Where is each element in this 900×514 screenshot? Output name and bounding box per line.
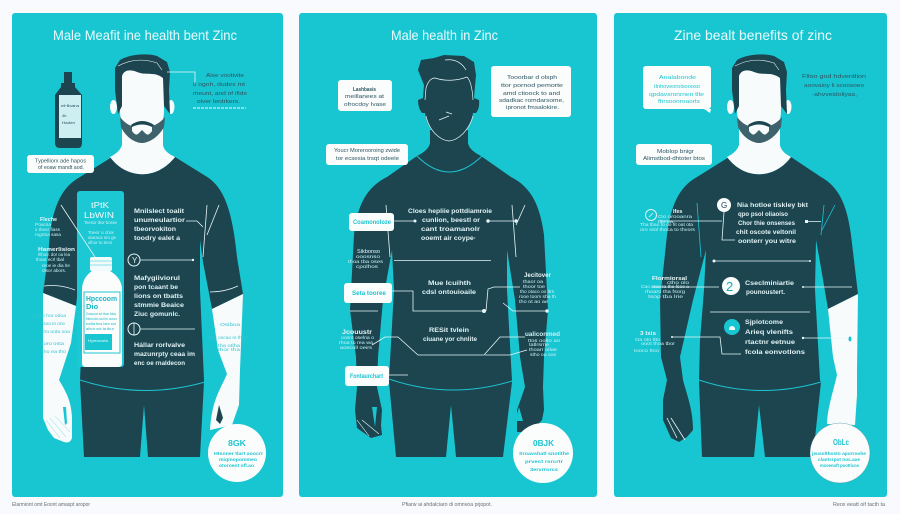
badge — [208, 424, 266, 482]
callout: top right card: sdadkac romdarsome, — [499, 98, 565, 104]
benefit three: tooco ttoo — [634, 348, 660, 353]
icon: dropper bottle: eHbara — [61, 103, 80, 108]
left side notes: tho oota ooa — [42, 329, 71, 334]
label: upper chest: cant troamanolr — [421, 226, 480, 233]
left side notes: tho ea tho — [42, 349, 67, 354]
label: lower: Fontaurchart — [350, 373, 383, 380]
left side notes — [33, 217, 248, 354]
left side notes: Fleche — [40, 217, 57, 223]
supplement card and bottle: bteocoto sa lhe ouron — [86, 317, 117, 321]
callout: speech bubble: fhrsoonroaorts — [658, 99, 700, 105]
badge: mxoenoft pootticox — [820, 463, 859, 469]
benefit list: lions on tbatts — [134, 293, 183, 300]
benefit two: ctho olo — [667, 280, 690, 285]
callout: speech bubble — [643, 66, 711, 113]
callout: speech bubble: Aoalabonde — [659, 75, 696, 81]
callout: top right note — [802, 74, 866, 98]
callout: top left card: meillanees at — [345, 94, 385, 100]
badge: Htsnner tlart aoocrr — [214, 451, 263, 457]
supplement card and bottle: Dio — [86, 302, 98, 311]
label: upper chest: Cloes hepliie pottdiamroie — [408, 208, 492, 215]
figure: bearded man with one dark arm — [660, 54, 858, 457]
label: middle — [344, 273, 557, 313]
label: middle: Jecitover — [524, 273, 552, 279]
label: upper chest: Coamonoloze — [353, 219, 392, 226]
left side notes: reoe ie dia lre — [42, 263, 71, 268]
badge — [513, 423, 573, 483]
label: lower: ciuane yor chnlite — [423, 336, 477, 343]
left side notes: tsoa to one — [42, 321, 66, 326]
callout: top right note: -ahvveidoliyas, — [812, 92, 858, 98]
title: Male Meafit ine health bent Zinc — [53, 27, 237, 43]
title: Male health in Zinc — [391, 27, 498, 43]
callout: top right card: amd ctioock to and — [503, 91, 560, 97]
badge: ObLc — [833, 437, 849, 447]
label: lower: RESit tvlein — [429, 327, 469, 334]
left side notes: Ilthoo: dor oa lea — [38, 252, 71, 257]
benefit list: pon tcaant be — [134, 284, 178, 291]
label: lower: aoscoll oeirs — [340, 345, 372, 350]
left side notes: x theor fiass — [35, 227, 60, 232]
label: middle: rooe toom sha th — [519, 294, 557, 299]
label: lower: Jcouustr — [342, 329, 373, 336]
benefit list: mazunrpty ceaa im — [134, 351, 195, 358]
label: lower: ttos oolto ao — [528, 338, 561, 343]
benefit one: oro otol thoca to thvors — [640, 227, 695, 232]
label: upper chest: cunlion, beestl or — [422, 217, 480, 224]
left side notes: otsor abors. — [42, 268, 66, 273]
icon: dropper bottle — [55, 72, 82, 148]
callout: mid left card: Alimstbod-dhtoter btos — [643, 156, 705, 162]
callout: bottle note — [27, 155, 94, 173]
benefit list: unumeulartior — [134, 217, 185, 224]
figure: bearded man in dark shirt — [43, 54, 243, 457]
benefit list — [128, 205, 219, 367]
callout: hair note — [167, 72, 247, 108]
badge: Sroavshatl snotithe — [519, 451, 569, 457]
label: upper chest: Sikbonso — [357, 249, 380, 255]
label: lower: thoarr otlae — [529, 347, 558, 352]
callout: top right card: ipronot fmsalokire. — [506, 105, 559, 111]
benefit two: pounoustert. — [746, 289, 785, 296]
left side notes: Ooce hor odoa — [33, 313, 67, 318]
left side notes: tha otlha — [218, 343, 241, 348]
callout: mid left card: tor ecsesia trsqt odeele — [336, 156, 399, 162]
benefit one: Tha tbao to oo fit oat ota — [640, 222, 694, 227]
badge: miqmopommeo — [219, 457, 257, 463]
benefit three: Sjplotcome — [745, 319, 783, 326]
callout: speech bubble: qpdavsronrnen tlte — [649, 92, 704, 98]
label: upper chest: cpolhos — [356, 264, 378, 269]
callout: top right card: Tooorbar d olsph — [507, 75, 557, 81]
benefit one: oonterr you witre — [738, 238, 796, 245]
label: upper chest: ooemt air coype· — [421, 235, 476, 242]
left side notes: Hamerlision — [38, 247, 76, 253]
benefit list: tbeorvokiton — [134, 226, 176, 233]
label: lower: oosnt oselna o — [341, 335, 375, 340]
callout: top left card: ofrocdoy Ivase — [344, 102, 386, 108]
benefit three: 3 Ixis — [640, 331, 656, 337]
badge: otoroent ofl.ao — [219, 463, 254, 469]
icon: dropper bottle: Haden — [62, 120, 75, 125]
label: lower: tatlrsrne — [529, 342, 550, 347]
label: upper chest: thoa tba oses — [348, 259, 383, 264]
label: lower — [339, 327, 561, 386]
panel: right figure — [614, 13, 887, 508]
left side notes: Poacsa — [35, 222, 52, 227]
badge — [810, 423, 870, 483]
supplement card and bottle — [61, 191, 124, 367]
benefit one: tlto oa — [658, 219, 674, 224]
label: middle: tho ot ao ae — [519, 299, 549, 304]
callout: top right card: ttor pornod pemorte — [501, 83, 563, 89]
label: lower: ualiconmed — [525, 331, 560, 338]
label: lower: stho oa oos — [530, 352, 556, 357]
badge: prvect rsrcrtr — [525, 459, 563, 465]
benefit two: 2 — [726, 279, 733, 294]
figure: silhouette — [350, 55, 548, 457]
supplement card and bottle: LbWIN — [84, 211, 114, 220]
caption: Reox eeatt oif tacth ta — [833, 502, 885, 508]
callout: top left card — [338, 80, 392, 111]
callout: top right note: Flloo god hdventlion — [802, 74, 866, 80]
benefit one: Ifes — [673, 209, 682, 215]
callout: top right card — [491, 66, 571, 117]
benefit one: chit oscote veltonil — [736, 229, 796, 236]
supplement card and bottle: Toeor o cbor — [88, 230, 115, 235]
callout: hair note: Alse vootivite — [206, 73, 244, 79]
supplement card and bottle: alhor to teos — [88, 240, 112, 245]
badge: clantsrpot noc.axe — [818, 457, 860, 463]
label: middle: tho otaco oo tlrs — [520, 289, 554, 294]
callout: mid left card: Youcr Morerooroing zwide — [334, 148, 400, 154]
label: middle: thoor toe — [523, 284, 546, 289]
supplement card and bottle: tPtK — [91, 201, 110, 210]
benefit one — [640, 198, 821, 245]
benefit list: stmmie Beaice — [134, 302, 184, 309]
badge: 3ervrrorcs — [530, 467, 558, 473]
callout: hair note: tl ogoh, dudes mt — [193, 82, 246, 88]
left side notes: Oor oocao re thea — [209, 335, 248, 340]
label: lower: rhoa to rea wa — [339, 340, 374, 345]
benefit three — [634, 319, 852, 356]
badge: jeusolthosto aporroohe — [811, 451, 866, 457]
benefit list: Hállar rorlvalve — [134, 342, 185, 349]
callout: hair note: oiver lentrkers. — [197, 99, 240, 105]
supplement card and bottle: ataraca sro ge — [88, 235, 117, 240]
left side notes: toro osta — [42, 341, 65, 346]
benefit three: Oa oto tlto — [635, 337, 661, 342]
callout: mid left card: Moblop bnigr — [657, 149, 694, 155]
label: upper chest — [348, 208, 518, 269]
callout: mid left card — [326, 144, 408, 165]
supplement card and bottle: Teesor tbor bosse — [84, 220, 118, 225]
benefit three: Arieq vlenifts — [745, 329, 793, 336]
callout: mid left card — [636, 144, 712, 165]
supplement card and bottle: Hpecoots — [88, 339, 108, 343]
benefit one: qpo psol oliaoiso — [738, 211, 788, 218]
callout: bottle note: Typelliorx ade hapos — [35, 158, 86, 164]
label: upper chest: ooosnso — [356, 254, 381, 259]
left side notes: thor tha — [218, 347, 241, 352]
callout: speech bubble: tlnhoveorolsoooso — [654, 84, 700, 90]
benefit list: Mafygiiviorul — [134, 275, 180, 282]
benefit two: Flormiorsal — [652, 276, 688, 282]
benefit list: toodry ealet a — [134, 235, 180, 242]
supplement card and bottle: eoilta ttos bea sor — [86, 322, 117, 326]
benefit list: Y — [132, 256, 138, 265]
benefit three: fcola eonvotlons — [745, 349, 805, 356]
callout: top left card: Lashbasis — [353, 87, 376, 93]
panel: center silhouette — [299, 13, 597, 508]
benefit one: Oo orooanra — [658, 214, 693, 219]
benefit three: rtactnr eetnue — [745, 339, 795, 346]
caption: Pfiarw ai ahdalciaro di omnvoa prjopot. — [402, 502, 492, 508]
callout: hair note: meunt, and of ifide — [193, 91, 247, 97]
callout: top right note: aoovaioy li scoosoeo — [804, 83, 864, 89]
left side notes: rogrtoa sasa — [35, 232, 62, 237]
benefit one: Chor thie onsenses — [738, 220, 795, 227]
icon: dropper bottle: 4b — [62, 113, 67, 118]
benefit one: G — [721, 201, 727, 210]
supplement card and bottle: alhor oct ta tbur — [86, 327, 115, 331]
label: middle: Seta tooree — [352, 290, 387, 297]
benefit two: tsop tba lrie — [648, 294, 684, 299]
panel: left figure with supplement — [12, 13, 283, 508]
supplement card and bottle: Zoacoot srt tbar bios — [86, 312, 116, 316]
badge: 8GK — [228, 438, 247, 448]
label: middle: thaor oa — [523, 279, 544, 284]
benefit list: Ziuc gomunlc. — [134, 311, 180, 318]
label: middle: cdsl ontouioaile — [422, 289, 476, 296]
benefit three: ooot thoa tbor — [641, 341, 676, 346]
label: middle: Mue lcuihth — [428, 280, 471, 287]
benefit two: rhoaro tha fsorg — [645, 289, 686, 294]
benefit two: Cao otoe to the fsoe a — [641, 284, 690, 289]
left side notes: Osiboa — [220, 322, 241, 327]
callout: bottle note: of eoaw mandt aod. — [38, 165, 84, 171]
benefit two — [641, 260, 852, 312]
benefit list: enc oe rnaldecon — [134, 360, 185, 367]
benefit one: Nia hotloe tiskley bkt — [737, 202, 809, 209]
title: Zine bealt benefits of zinc — [674, 27, 832, 43]
caption: Elarmiont omt Eoont amaspt aropor — [12, 502, 90, 508]
supplement card and bottle: Hpccoom — [86, 294, 117, 303]
benefit two: Cseclminiartie — [745, 280, 794, 287]
left side notes: thoar ecrl tbal — [36, 257, 64, 262]
badge: 0BJK — [533, 438, 555, 448]
benefit list: Mnilslect toalit — [134, 208, 185, 215]
